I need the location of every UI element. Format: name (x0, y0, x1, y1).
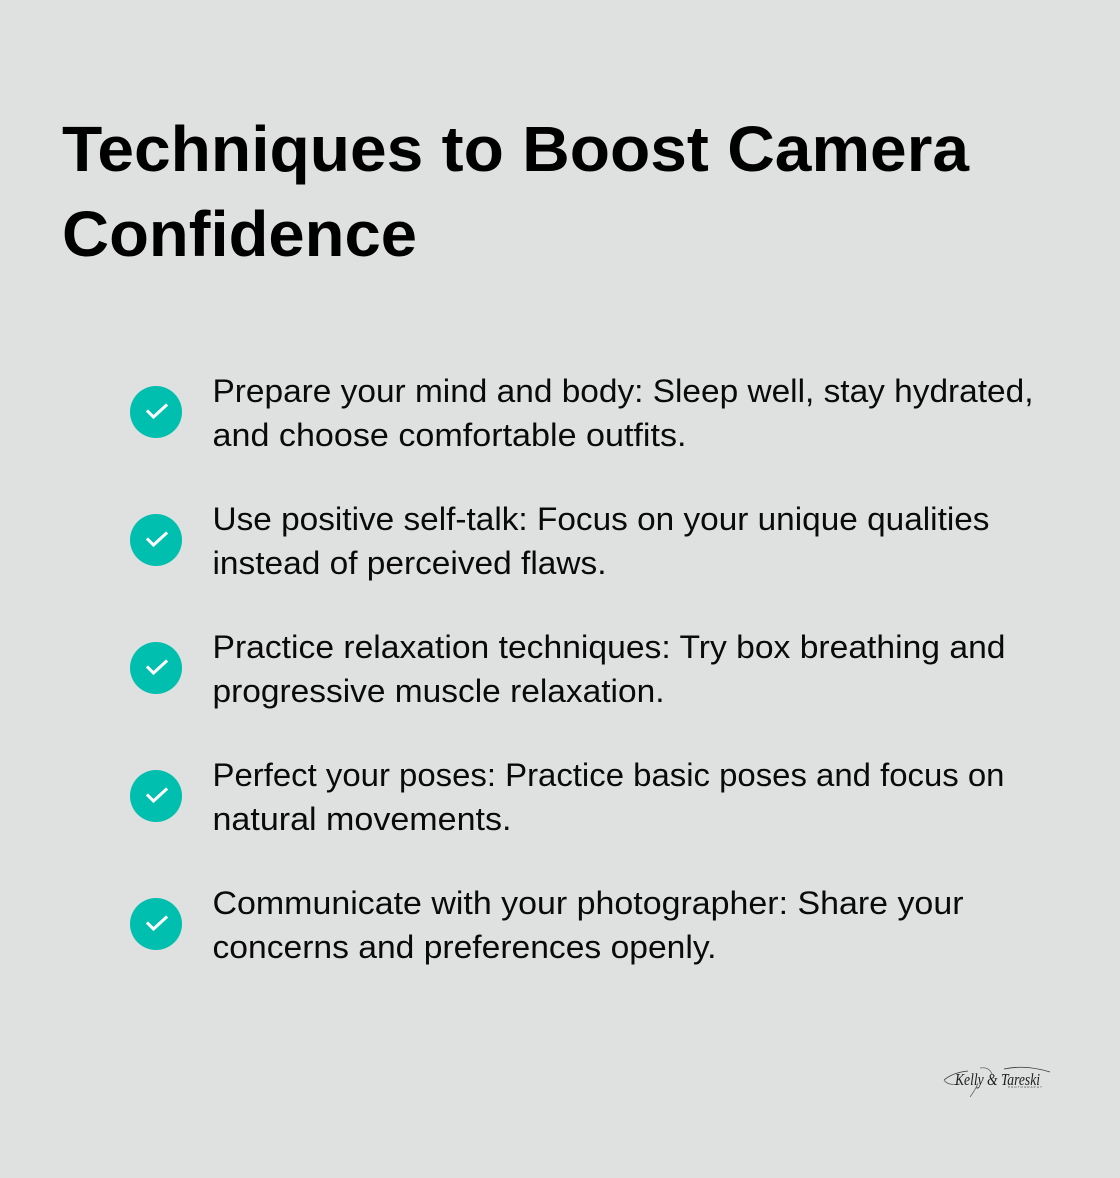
item 1: prepare your mind and body (130, 373, 1034, 453)
logo: signature: PHOTOGRAPHY (1008, 1085, 1042, 1089)
item 2: positive self-talk: instead of perceived flaws. (212, 545, 606, 581)
item 3: relaxation techniques: progressive muscle relaxation. (212, 673, 664, 709)
title (62, 113, 969, 270)
item 4: perfect your poses: natural movements. (212, 801, 512, 837)
title: Confidence (62, 198, 417, 270)
item 5: communicate with your photographer (130, 885, 964, 965)
item 4: perfect your poses (130, 757, 1005, 837)
item 5: communicate with your photographer: concerns and preferences openly. (212, 929, 716, 965)
item 4: perfect your poses: Perfect your poses: Practice basic poses and focus on (212, 757, 1005, 793)
item 3: relaxation techniques: Practice relaxation techniques: Try box breathing and (212, 629, 1006, 665)
item 1: prepare your mind and body: Prepare your mind and body: Sleep well, stay hydrated, (212, 373, 1034, 409)
item 5: communicate with your photographer: Communicate with your photographer: Share your (212, 885, 964, 921)
item 2: positive self-talk: Use positive self-talk: Focus on your unique qualities (212, 501, 989, 537)
logo: signature: Kelly & Tareski (954, 1070, 1040, 1089)
title: Techniques to Boost Camera (62, 113, 969, 185)
item 1: prepare your mind and body: and choose comfortable outfits. (212, 417, 686, 453)
logo: signature (944, 1067, 1050, 1097)
item 2: positive self-talk (130, 501, 989, 581)
item 3: relaxation techniques (130, 629, 1006, 709)
checklist (130, 373, 1034, 965)
